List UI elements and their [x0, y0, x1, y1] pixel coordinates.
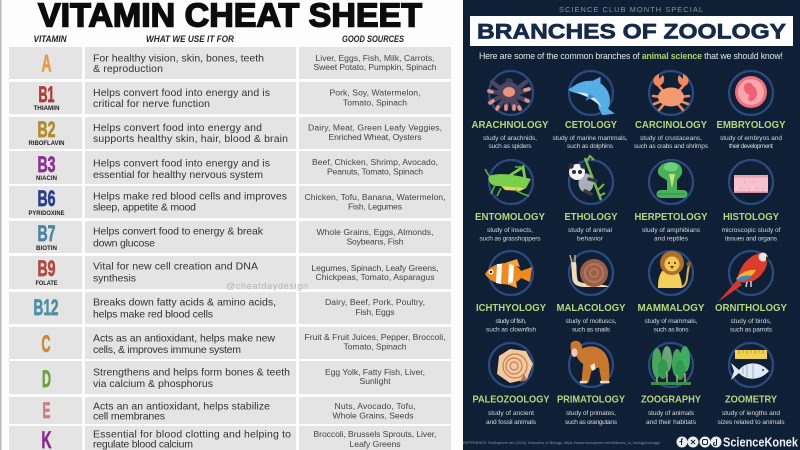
row: vitamin A: Sweet Potato, Pumpkin, Spinach: [314, 62, 437, 72]
watermark: @cheatdaydesign: @cheatdaydesign: [226, 281, 308, 291]
row: vitamin B7: down glucose: [93, 238, 155, 250]
row: vitamin B9: [36, 256, 438, 287]
row: vitamin A: [42, 50, 437, 78]
row: vitamin E: cell membranes: [93, 410, 165, 422]
subtitle: Here are some of the common branches of animal science that we should know!: [479, 51, 783, 61]
row 1 labels: study of embryos and: [720, 135, 782, 142]
row 1 labels: CARCINOLOGY: [635, 120, 707, 131]
row: vitamin K: [42, 427, 436, 450]
row: vitamin B6: [28, 186, 446, 217]
icon: snail: [570, 255, 609, 287]
row: vitamin B2: Enriched Wheat, Oysters: [328, 132, 422, 142]
row 1 labels: EMBRYOLOGY: [716, 120, 786, 131]
row: vitamin B1: Tomato, Spinach: [343, 98, 407, 108]
icon: orangutan: [571, 341, 610, 383]
table: row backgrounds: [9, 47, 451, 450]
row 4 labels: ZOOMETRY: [725, 394, 777, 406]
icon: grasshopper: [485, 167, 531, 196]
row: vitamin B3: NIACIN: [36, 175, 57, 182]
row: vitamin B1: B1: [38, 82, 54, 107]
row: vitamin B9: FOLATE: [36, 280, 58, 287]
row 1 labels: ARACHNOLOGY: [472, 120, 549, 131]
column headings: VITAMIN: [34, 34, 67, 44]
row 2 labels: tissues and organs: [725, 236, 778, 242]
icon: parrot: [718, 252, 770, 302]
row 2 labels: behavior: [577, 236, 604, 242]
row: vitamin B9: Vital for new cell creation and DNA: [93, 260, 258, 272]
row 4 labels: and fossil animals: [486, 419, 537, 426]
row: vitamin D: [42, 366, 425, 393]
row 3 labels: study of molluscs,: [566, 318, 617, 325]
row: vitamin D: via calcium & phosphorus: [93, 378, 213, 390]
row: vitamin K: Leafy Greens: [350, 439, 400, 449]
row 2 labels: [475, 212, 781, 242]
row: vitamin B2: Dairy, Meat, Green Leafy Veggies,: [308, 122, 442, 132]
row: vitamin B12: Fish, Eggs: [356, 307, 394, 317]
row: vitamin B1: critical for nerve function: [93, 98, 210, 110]
row: vitamin D: Egg Yolk, Fatty Fish, Liver,: [325, 367, 425, 377]
row: vitamin B1: [34, 82, 420, 112]
row 1 labels: their development: [729, 143, 773, 150]
row 3 labels: study of fish,: [496, 318, 527, 325]
row 3 labels: study of birds,: [730, 318, 772, 325]
row: vitamin B2: supports healthy skin, hair, blood & brain: [93, 133, 288, 145]
icon: embryo: [735, 76, 767, 108]
row: vitamin B7: Soybeans, Fish: [346, 236, 404, 246]
row 1 labels: such as dolphins: [567, 143, 614, 150]
row: vitamin D: Sunlight: [360, 376, 391, 386]
row: vitamin B2: RIBOFLAVIN: [28, 140, 65, 147]
row 3 labels: MALACOLOGY: [556, 303, 626, 314]
row 3 labels: study of mammals,: [644, 318, 698, 325]
row: vitamin B9: Chickpeas, Tomato, Asparagus: [316, 272, 434, 282]
row: vitamin E: [42, 398, 416, 423]
row 1 labels: study of arachnids,: [483, 135, 537, 142]
row: vitamin B7: Helps convert food to energy & break: [93, 226, 264, 238]
row 2 labels: ENTOMOLOGY: [475, 212, 545, 223]
row: vitamin B7: [36, 221, 434, 252]
row: vitamin B7: BIOTIN: [36, 245, 57, 252]
row: vitamin B3: [36, 152, 438, 182]
row 2 labels: ETHOLOGY: [564, 212, 618, 223]
row 4 labels: and their habitats: [646, 419, 697, 426]
row: vitamin B6: Chicken, Tofu, Banana, Watermelon,: [304, 192, 446, 202]
row: vitamin B3: Peanuts, Tomato, Spinach: [327, 166, 423, 176]
title banner: [470, 16, 793, 46]
row: vitamin E: Nuts, Avocado, Tofu,: [334, 401, 416, 411]
icon: tissue sample: [734, 175, 768, 193]
row: vitamin C: Fruit & Fruit Juices, Pepper, Broccoli,: [304, 332, 446, 342]
row: vitamin B2: Helps convert food into energy and: [93, 122, 262, 134]
footer reference: REFERENCE: BioExplorer.net (2024). Branches of Biology. https://www.bioexplorer.net/divisions_of_biology/zoology/: [463, 441, 660, 445]
row 1 labels: such as spiders: [488, 143, 532, 150]
row: vitamin B12: helps make red blood cells: [93, 308, 213, 320]
row: vitamin C: [42, 331, 446, 358]
icon rings: [489, 71, 773, 387]
column headings: GOOD SOURCES: [342, 34, 404, 44]
row 1 labels: [472, 120, 786, 150]
column headings: [34, 34, 404, 44]
row 4 labels: ZOOGRAPHY: [641, 394, 701, 406]
row 1 labels: study of crustaceans,: [640, 135, 702, 142]
icon: cobra: [656, 162, 688, 198]
eyebrow: SCIENCE CLUB MONTH SPECIAL: [559, 5, 703, 14]
row: vitamin B2: [28, 117, 442, 147]
row: vitamin E: E: [42, 398, 50, 423]
row 3 labels: ICHTHYOLOGY: [476, 303, 546, 314]
row: vitamin D: D: [42, 366, 51, 393]
row 4 labels: PALEOZOOLOGY: [472, 394, 550, 406]
row: vitamin A: Liver, Eggs, Fish, Milk, Carrots,: [316, 53, 434, 63]
row: vitamin B9: synthesis: [93, 272, 136, 284]
row 3 labels: MAMMALOGY: [638, 303, 705, 314]
row: vitamin B3: Helps convert food into energy and is: [93, 158, 270, 170]
row 3 labels: such as lions: [654, 326, 689, 334]
icon: clownfish: [485, 259, 532, 288]
row: vitamin B7: B7: [38, 221, 56, 246]
row: vitamin E: Whole Grains, Seeds: [332, 410, 414, 420]
row 2 labels: study of amphibians: [642, 227, 701, 234]
row 1 labels: such as crabs and shrimps: [634, 143, 709, 150]
panel: vitamin cheat sheet: [9, 0, 451, 450]
row: vitamin C: Tomato, Spinach: [344, 342, 407, 352]
row: vitamin B6: Fish, Legumes: [348, 202, 402, 212]
row: vitamin B9: Legumes, Spinach, Leafy Greens,: [312, 263, 438, 273]
icon: forest: [651, 346, 691, 385]
icon: fossil: [497, 349, 533, 383]
row: vitamin B7: Whole Grains, Eggs, Almonds,: [316, 227, 434, 237]
icon: panda on bamboo: [568, 156, 605, 200]
row 3 labels: such as snails: [572, 326, 611, 334]
row: vitamin K: Essential for blood clotting and helping to: [93, 428, 291, 440]
row: vitamin B6: B6: [38, 186, 56, 211]
row: vitamin B3: essential for healthy nervous system: [93, 169, 263, 181]
row: vitamin B12: Dairy, Beef, Pork, Poultry,: [325, 297, 425, 307]
row 3 labels: ORNITHOLOGY: [715, 303, 787, 314]
row 4 labels: study of primates,: [566, 410, 616, 417]
row 4 labels: [472, 394, 785, 426]
icon: dolphin: [568, 77, 615, 115]
row: vitamin A: For healthy vision, skin, bones, teeth: [93, 52, 264, 64]
row 1 labels: study of marine mammals,: [552, 135, 628, 142]
row 4 labels: study of ancient: [488, 410, 534, 417]
row: vitamin B2: B2: [38, 117, 56, 142]
row 3 labels: such as parrots: [730, 326, 773, 334]
row: vitamin B12: Breaks down fatty acids & amino acids,: [93, 296, 276, 308]
title banner: BRANCHES OF ZOOLOGY: [477, 20, 786, 44]
row 4 labels: sizes related to animals: [718, 419, 785, 426]
row 2 labels: and reptiles: [654, 236, 689, 242]
row 2 labels: study of animal: [568, 227, 613, 234]
row 3 labels: [476, 303, 787, 334]
row: vitamin K: Broccoli, Brussels Sprouts, Liver,: [314, 429, 436, 439]
row: vitamin B6: PYRIDOXINE: [28, 210, 65, 217]
row: vitamin C: Acts as an antioxidant, helps make new: [93, 332, 275, 344]
row 3 labels: such as clownfish: [486, 326, 536, 334]
row: vitamin E: Acts an an antioxidant, helps stabilize: [93, 400, 270, 412]
row 2 labels: such as grasshoppers: [480, 236, 541, 242]
row: vitamin C: C: [42, 331, 50, 358]
row 2 labels: HERPETOLOGY: [634, 212, 708, 223]
row 2 labels: microscopic study of: [722, 227, 781, 234]
row: vitamin D: Strengthens and helps form bones & teeth: [93, 366, 290, 378]
row 2 labels: HISTOLOGY: [723, 212, 779, 223]
row: vitamin B3: B3: [38, 152, 56, 177]
icon: lion: [658, 251, 692, 288]
row: vitamin B6: sleep, appetite & mood: [93, 202, 196, 214]
row 1 labels: CETOLOGY: [565, 120, 617, 131]
panel: branches of zoology: [463, 0, 800, 450]
icon: spider: [489, 78, 529, 109]
row: vitamin B6: Helps make red blood cells and improves: [93, 190, 287, 202]
row: vitamin B1: THIAMIN: [34, 105, 60, 112]
row: vitamin A: A: [42, 50, 52, 78]
row: vitamin B9: B9: [38, 256, 56, 281]
row: vitamin C: cells, & improves immune system: [93, 344, 241, 356]
row: vitamin B12: [34, 295, 425, 320]
row: vitamin B12: B12: [34, 295, 58, 320]
icon: crab: [653, 74, 689, 110]
row 4 labels: study of animals: [648, 410, 695, 417]
social icons: [676, 436, 722, 448]
icon: ruler and fish: [731, 350, 769, 380]
row: vitamin A: & reproduction: [93, 63, 163, 75]
row 4 labels: PRIMATOLOGY: [557, 394, 625, 406]
row: vitamin B1: Pork, Soy, Watermelon,: [330, 88, 420, 98]
row 4 labels: such as orangutans: [565, 419, 618, 426]
column headings: WHAT WE USE IT FOR: [146, 34, 234, 44]
row: vitamin B1: Helps convert food into energy and is: [93, 87, 270, 99]
row 4 labels: study of lengths and: [722, 410, 780, 417]
row 2 labels: study of insects,: [487, 227, 533, 234]
row: vitamin B3: Beef, Chicken, Shrimp, Avocado,: [312, 157, 438, 167]
